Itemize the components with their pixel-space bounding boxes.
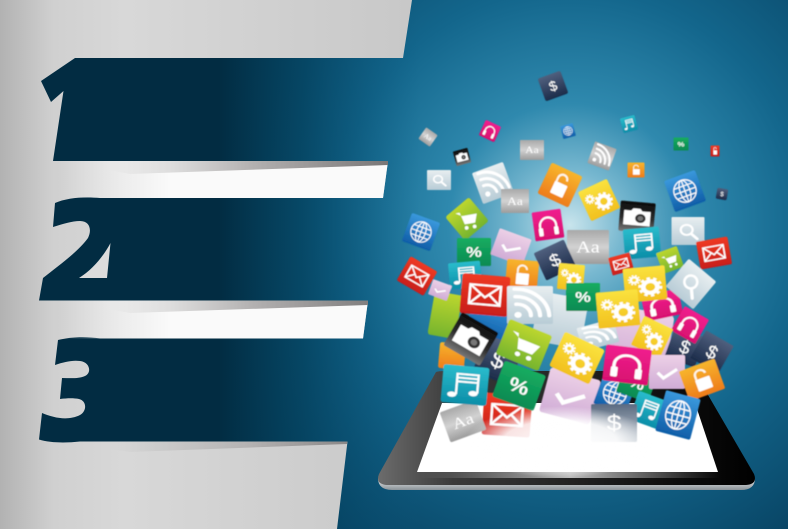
tile: headphones — [532, 209, 564, 241]
tile: search — [672, 217, 704, 245]
tile: note — [623, 226, 661, 260]
tile: percent small — [674, 138, 688, 150]
tile: percent top stack — [566, 283, 600, 311]
tile: camera — [618, 201, 656, 233]
tile: note behind — [629, 391, 667, 429]
tile: globe left — [402, 213, 440, 251]
tile: globe large — [655, 390, 701, 440]
tile: Aa low — [440, 399, 486, 443]
tile: percent large — [492, 361, 546, 411]
tile: lock right — [679, 358, 725, 402]
tile: cart small — [656, 246, 684, 274]
tile: camera large — [443, 312, 499, 366]
back tile lilac — [605, 305, 675, 375]
tile: Aa large — [567, 230, 609, 264]
tile: dollar low: $ — [487, 346, 509, 374]
tile: percent large: % — [506, 372, 532, 400]
tile: percent behind: % — [626, 372, 648, 394]
tile: Aa: Aa — [525, 146, 539, 156]
tile: dollar centre — [534, 239, 576, 281]
tile: percent: % — [466, 244, 482, 261]
bezel reflection — [420, 472, 720, 478]
tile: search tilted — [666, 259, 716, 309]
tile: red small — [710, 146, 720, 156]
tile: gear tilted — [631, 316, 673, 358]
strip 3 shadow — [60, 442, 348, 452]
tile: percent small: % — [678, 140, 685, 148]
tile: dollar bottom — [591, 404, 637, 442]
tile: dollar tiny — [716, 188, 728, 200]
tablet screen — [417, 403, 718, 472]
tile: wifi small — [587, 141, 617, 171]
numeral 2 inner wedge — [79, 243, 110, 278]
tile: headphones behind — [641, 288, 683, 322]
tile: Aa large: Aa — [576, 238, 600, 256]
back tile blue — [464, 292, 516, 344]
tile: Aa low: Aa — [450, 409, 477, 433]
tile: dollar tiny: $ — [720, 191, 725, 199]
tile: Aa — [520, 140, 544, 160]
tile: dollar right — [690, 330, 734, 374]
tile: dollar low — [472, 334, 524, 386]
tile: envelope right — [696, 236, 732, 270]
tile: envelope left — [397, 256, 437, 296]
tile: envelope large — [459, 273, 511, 317]
tile: cart — [445, 197, 489, 241]
tile: check left — [428, 279, 452, 301]
tile: note small — [620, 115, 638, 133]
back tile light — [531, 291, 589, 349]
tablet rim — [378, 478, 755, 490]
tile: envelope low — [482, 392, 532, 438]
tile: gear large — [549, 331, 605, 385]
tile: gear — [578, 179, 620, 221]
tile: check — [490, 228, 532, 266]
tile: gear centre — [557, 263, 585, 291]
back tile orange — [438, 342, 466, 370]
tile: percent top stack: % — [575, 289, 591, 306]
tile: dollar centre: $ — [546, 249, 564, 271]
tile: headphones small — [479, 120, 501, 142]
tablet — [378, 371, 755, 490]
tile: check large — [539, 367, 601, 425]
tile: percent behind — [616, 363, 658, 403]
tile: dollar behind: $ — [677, 335, 694, 359]
tile: Aa mid: Aa — [507, 195, 523, 208]
tile: gear stack — [596, 289, 640, 329]
tile: Aa small: Aa — [422, 132, 433, 143]
tile: camera small — [453, 148, 471, 166]
tile: lock — [537, 162, 583, 208]
tile: dollar bottom: $ — [607, 412, 622, 436]
tile: headphones large — [602, 344, 652, 386]
tile: dollar top — [538, 71, 568, 101]
white strip 1 — [50, 161, 388, 198]
tile: wifi — [472, 162, 514, 204]
tablet body — [378, 371, 755, 485]
tile: check right — [649, 355, 685, 389]
left grey panel with numerals 1 2 3 cut out of the bands — [0, 0, 412, 529]
tile: dollar behind — [664, 326, 706, 368]
tile: lock centre — [505, 259, 539, 291]
tile: note large — [440, 364, 490, 406]
tile: lock small — [628, 162, 644, 178]
tile: note back — [448, 261, 482, 289]
app icon cloud — [397, 71, 734, 443]
tile: dollar right: $ — [702, 340, 722, 364]
tile: gear top stack — [623, 265, 667, 303]
tile: globe behind — [593, 371, 637, 415]
tile: globe small — [560, 123, 576, 139]
tile: Aa mid — [501, 189, 529, 213]
screen glow — [465, 406, 655, 478]
tile: percent — [457, 238, 491, 266]
dark band overlay — [0, 0, 420, 529]
back tile lime — [427, 291, 463, 339]
tile: envelope small — [608, 252, 634, 276]
tile: headphones tilted — [671, 306, 709, 344]
tile: globe right — [664, 170, 706, 212]
white strip 2 — [40, 300, 368, 338]
tile: dollar top: $ — [547, 77, 560, 95]
tile: Aa small — [418, 127, 438, 147]
tile: wifi large — [507, 286, 553, 324]
tile: wifi behind — [577, 318, 619, 352]
tile: search small — [427, 170, 451, 190]
tile: cart large — [496, 319, 552, 371]
